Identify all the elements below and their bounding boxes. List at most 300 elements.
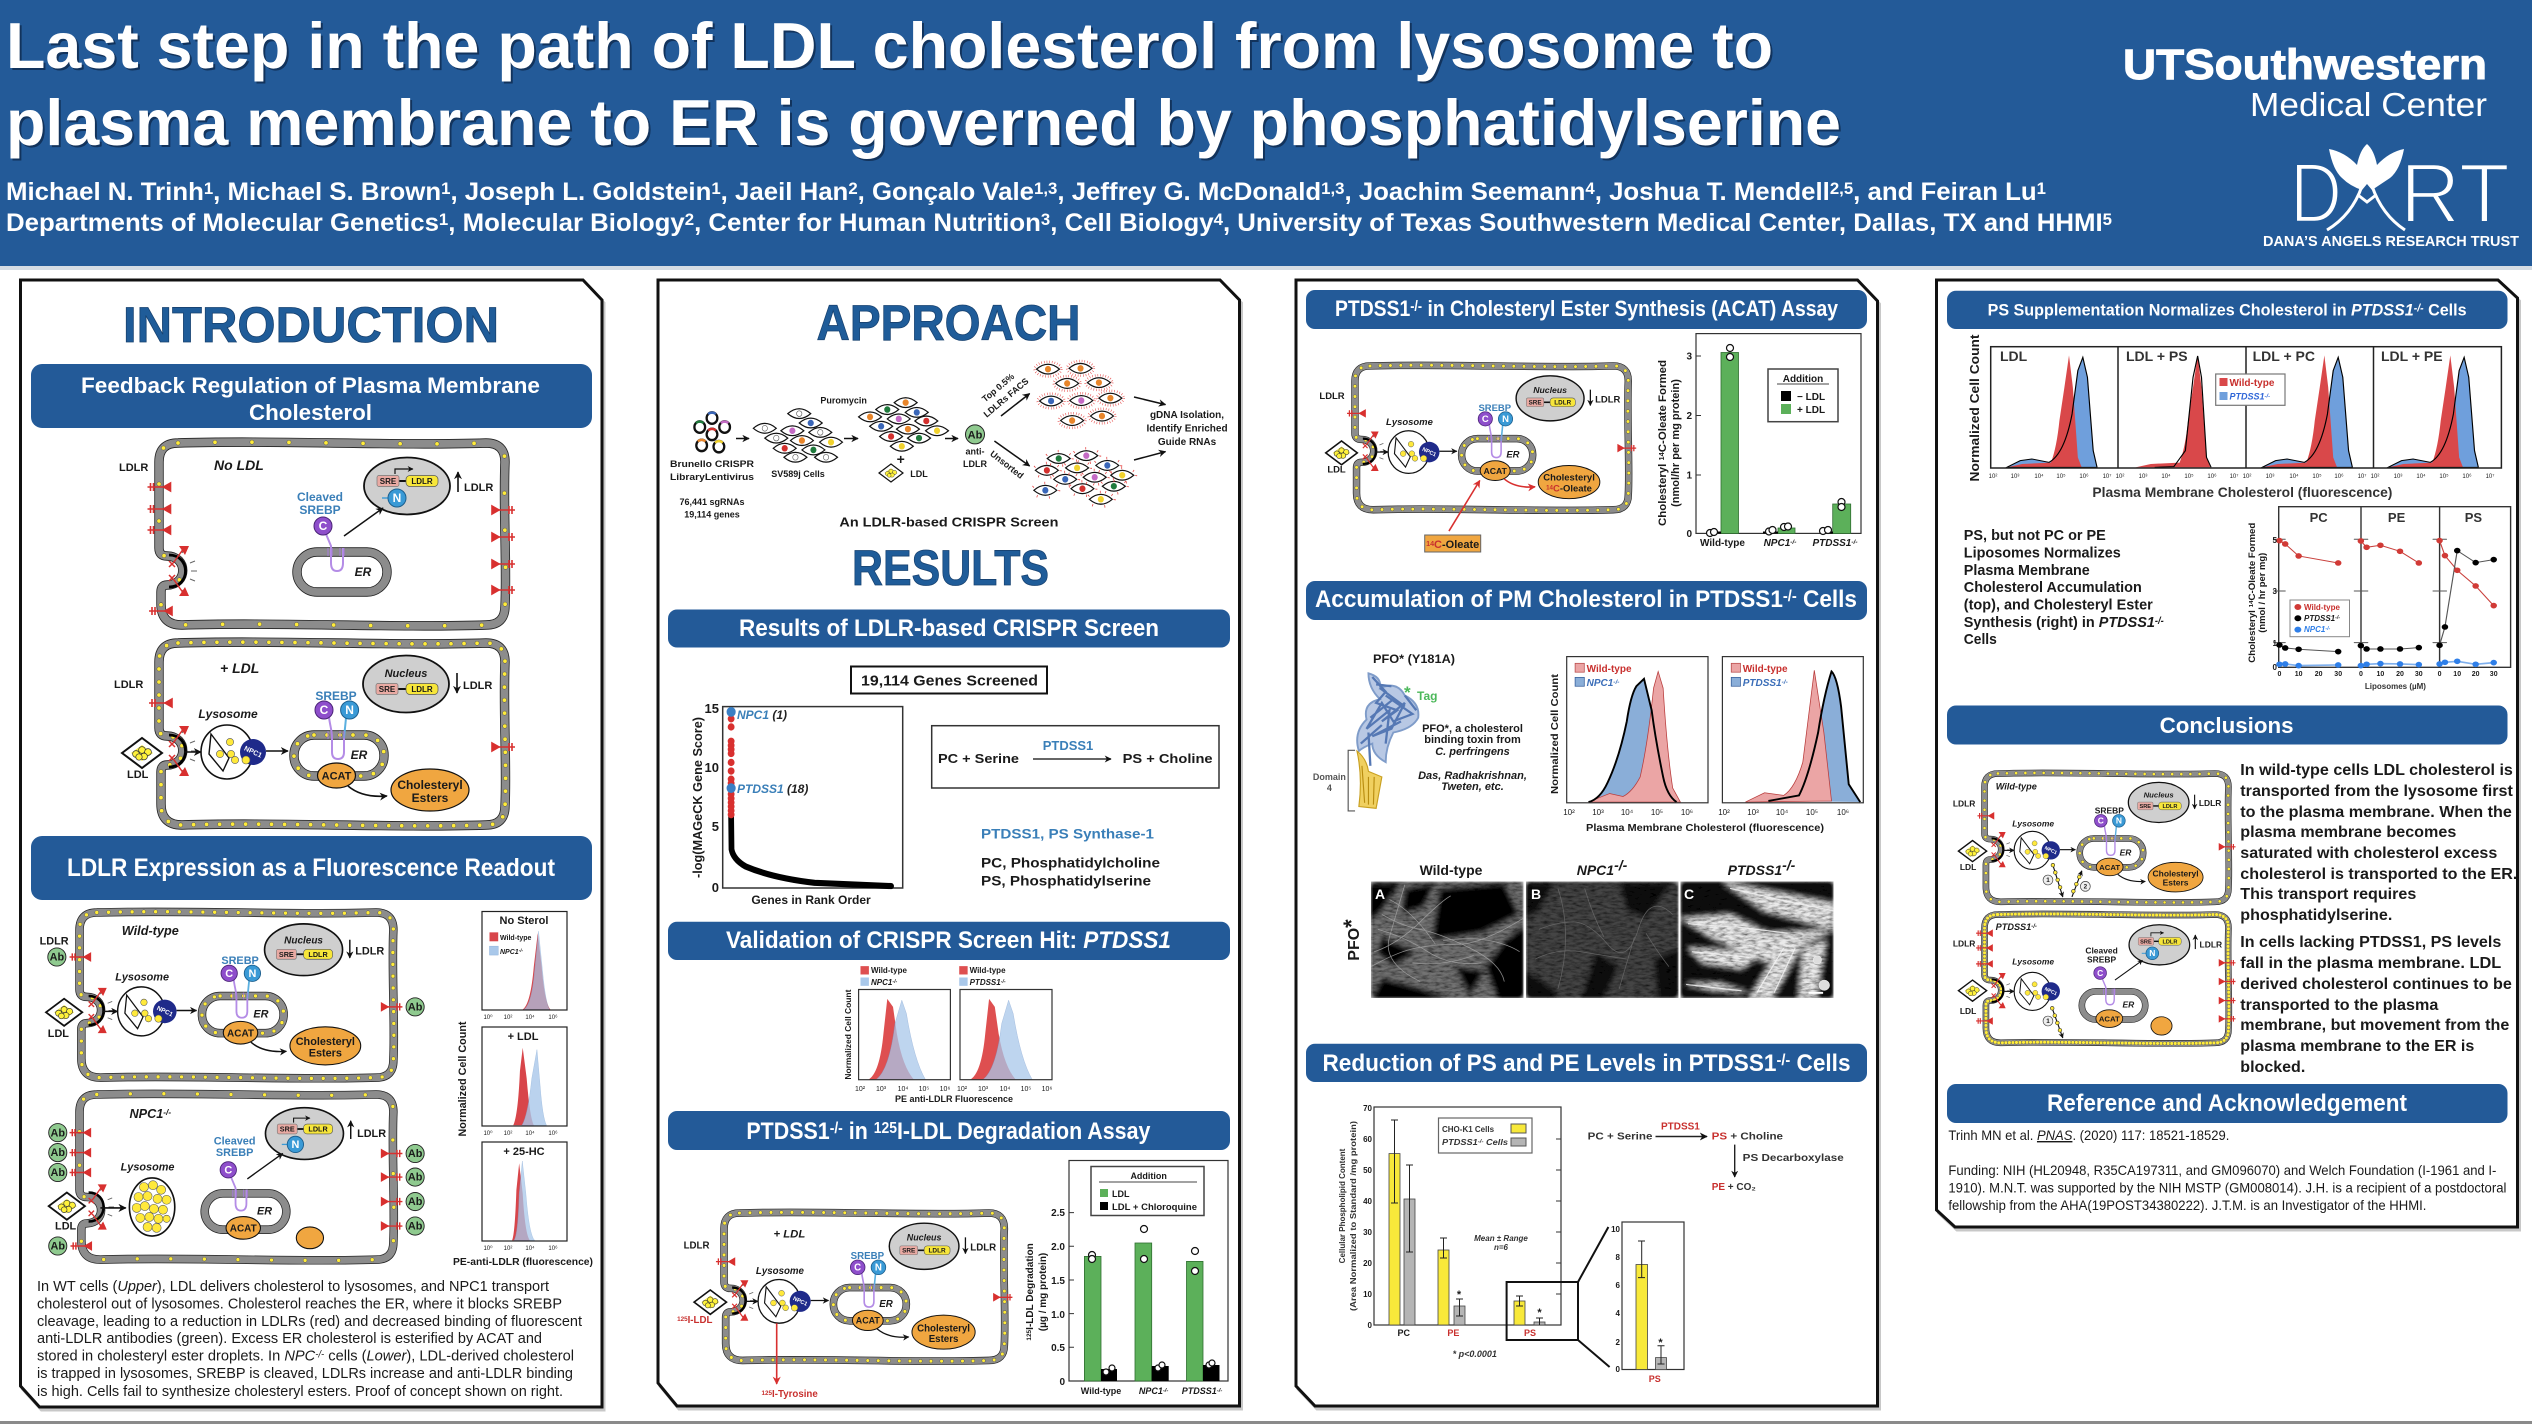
diagram: PTDSS1 knockout conclusion cell: NPC1 <box>2043 986 2058 997</box>
figure: PFO toxin structure: 4 <box>1327 783 1332 793</box>
diagram: wild-type cell: LDLR <box>40 935 69 947</box>
chart: liposome histograms: 10⁶ <box>2462 473 2472 480</box>
diagram: CRISPR screen workflow: 76,441 sgRNAs <box>679 497 745 507</box>
legend: cell lines: CHO-K1 Cells <box>1442 1125 1495 1134</box>
section header: reference and acknowledgement: Reference and Acknowledgement <box>2047 1090 2407 1117</box>
chart: cholesteryl oleate bars: Wild-type <box>1700 538 1745 549</box>
diagram: wild-type conclusion cell: ACAT <box>2099 863 2120 872</box>
chart: cholesteryl ester liposome series: 0 <box>2277 671 2281 678</box>
chart: liposome histograms: 10⁵ <box>2184 473 2194 480</box>
text block: PTDSS1 conclusion: blocked. <box>2240 1059 2305 1076</box>
diagram: wild-type cell: LDLR <box>308 950 328 959</box>
chart: liposome histograms: 10² <box>1989 474 1997 480</box>
logo: UT Southwestern Medical Center: Medical Center <box>2250 86 2487 123</box>
chart: gene rank scatter: 10 <box>705 760 719 775</box>
chart: PS inset bars: 6 <box>1616 1281 1621 1290</box>
figure: PFO toxin structure: Tag <box>1417 689 1437 703</box>
chart: gene rank scatter: 5 <box>712 819 719 834</box>
panel: supplementation and conclusions <box>1936 280 2520 1230</box>
chart: plasma membrane cholesterol histograms: 10⁴ <box>1621 808 1634 817</box>
text block: PTDSS1 conclusion: derived cholesterol continues to be <box>2240 976 2512 993</box>
chart: validation histograms <box>844 966 1052 1104</box>
diagram: CRISPR screen workflow: + <box>897 451 905 467</box>
diagram: cell in ACAT assay: NPC1 <box>1421 447 1437 458</box>
diagram: wild-type cell: C <box>225 968 233 980</box>
chart: phospholipid bars: Mean ± Range <box>1474 1234 1528 1243</box>
text block: introduction description: In WT cells (Upper), LDL delivers cholesterol to lysosomes, and NPC1 transport <box>37 1278 550 1295</box>
figure: PFO micrographs: PTDSS1-/- <box>1728 857 1796 878</box>
section header: LDLR expression <box>31 836 592 900</box>
diagram: cell in degradation assay: 125I-Tyrosine <box>762 1389 818 1400</box>
diagram: phospholipid pathway: PC + Serine <box>1588 1132 1653 1142</box>
chart: plasma membrane cholesterol histograms: 10⁶ <box>1837 808 1849 817</box>
diagram: wild-type conclusion cell: LDLR <box>1953 799 1975 809</box>
text block: wild-type conclusion: phosphatidylserine. <box>2240 907 2392 924</box>
diagram: cell with LDL: ER <box>351 748 368 762</box>
section header: PS supplementation <box>1947 291 2508 329</box>
chart: cholesteryl ester liposome series: Cholesteryl 14C-Oleate Formed <box>2247 523 2257 663</box>
diagram: cell in degradation assay: NPC1 <box>792 1296 808 1308</box>
chart: phospholipid bars <box>1338 1104 1610 1367</box>
diagram: cell without LDL: LDLR <box>464 482 493 494</box>
diagram: cell in degradation assay: C <box>854 1263 861 1274</box>
chart: LDL degradation bars: 1.5 <box>1051 1276 1065 1287</box>
cell population: puromycin selected <box>859 398 949 451</box>
chart: liposome histograms: Normalized Cell Count <box>1967 334 1982 482</box>
diagram: wild-type conclusion cell: C <box>2098 816 2104 826</box>
diagram: phospholipid pathway: PS + Choline <box>1712 1132 1784 1142</box>
chart: cholesteryl oleate bars <box>1657 334 1861 549</box>
legend: ACAT addition <box>1768 369 1838 422</box>
diagram: PTDSS1 knockout conclusion cell: SREBP <box>2087 954 2116 964</box>
chart: PS inset bars: 8 <box>1616 1253 1621 1262</box>
chart: cholesteryl ester liposome series: 10 <box>2453 671 2461 678</box>
legend: cell lines: PTDSS1 -/- Cells <box>1442 1138 1509 1147</box>
section header: CRISPR screen results <box>668 610 1230 648</box>
diagram: NPC1 knockout cell: Ab <box>51 1167 65 1179</box>
diagram: PTDSS1 knockout conclusion cell: LDLR <box>2162 939 2177 945</box>
text block: reference and funding <box>1948 1127 2506 1213</box>
chart: LDLR fluorescence histograms: 10⁶ <box>548 1130 558 1137</box>
diagram: PTDSS1 knockout conclusion cell: C <box>2097 968 2103 978</box>
chart: liposome histograms: 10³ <box>2011 474 2019 480</box>
diagram: NPC1 knockout cell: SREBP <box>216 1147 253 1159</box>
text block: liposome summary: (top), and Cholesteryl Ester <box>1964 596 2153 614</box>
chart: validation histograms: Wild-type <box>970 966 1006 975</box>
diagram: cell in degradation assay: + LDL <box>773 1228 805 1240</box>
chart: PS inset bars: 2 <box>1616 1338 1621 1347</box>
text block: PTDSS1 conclusion: plasma membrane to the ER is <box>2240 1038 2474 1055</box>
diagram: cell in ACAT assay <box>1319 365 1636 531</box>
diagram: wild-type cell: SRE <box>279 950 294 959</box>
chart: phospholipid bars: * <box>1457 1289 1462 1301</box>
diagram: PTDSS1 knockout conclusion cell: Cleaved <box>2085 945 2118 955</box>
diagram: wild-type conclusion cell: Cholesteryl <box>2153 868 2199 878</box>
diagram: NPC1 knockout cell: Ab <box>408 1172 423 1184</box>
chart: cholesteryl ester liposome series: PS <box>2465 510 2482 525</box>
chart: cholesteryl oleate bars: 0 <box>1686 529 1692 540</box>
diagram: CRISPR screen workflow: LDLRs FACS <box>982 376 1031 419</box>
chart: phospholipid bars: PC <box>1397 1328 1410 1338</box>
chart: gene rank scatter: Genes in Rank Order <box>751 893 871 907</box>
text block: wild-type conclusion: In wild-type cells LDL cholesterol is <box>2240 762 2513 779</box>
diagram: wild-type cell: Wild-type <box>122 924 179 938</box>
diagram: CRISPR screen workflow: Puromycin <box>820 396 867 406</box>
diagram: phospholipid pathway: PS Decarboxylase <box>1743 1153 1844 1164</box>
diagram: cell in ACAT assay: Cholesteryl <box>1543 472 1595 483</box>
text block: reference and funding: 1910). M.N.T. was supported by the NIH MSTP (GM008014). J.H. is a recipient of a postdoctoral <box>1948 1180 2506 1196</box>
diagram: CRISPR screen workflow: Top 0.5% <box>980 371 1016 404</box>
chart: liposome histograms: 10⁷ <box>2103 473 2111 480</box>
chart: liposome histograms: 10⁴ <box>2289 473 2299 480</box>
diagram: NPC1 knockout cell: N <box>291 1139 299 1151</box>
arrows: workflow steps <box>736 394 1166 466</box>
chart: LDL degradation bars: 125I-LDL Degradation <box>1025 1243 1036 1341</box>
chart: liposome histograms: 10⁶ <box>2079 473 2089 480</box>
chart: liposome histograms: 10⁶ <box>2334 473 2344 480</box>
diagram: NPC1 knockout cell: ER <box>257 1205 272 1217</box>
text block: liposome summary <box>1964 527 2164 648</box>
chart: liposome histograms: 10⁷ <box>2486 473 2494 480</box>
chart: phospholipid bars: 20 <box>1363 1259 1373 1268</box>
chart: LDLR fluorescence histograms: 10² <box>504 1131 512 1137</box>
chart: plasma membrane cholesterol histograms: 10⁶ <box>1681 808 1693 817</box>
diagram: cell with LDL: ACAT <box>322 770 352 782</box>
diagram: cell with LDL: Lysosome <box>198 707 258 721</box>
panel: approach and results <box>658 280 1242 1409</box>
chart: cholesteryl ester liposome series: 10 <box>2377 671 2384 678</box>
chart: LDLR fluorescence histograms: 10² <box>504 1015 512 1021</box>
legend: liposome histograms: PTDSS1-/- <box>2230 392 2270 402</box>
diagram: wild-type cell: NPC1 <box>156 1005 174 1019</box>
diagram: cell in ACAT assay: Nucleus <box>1533 385 1567 395</box>
chart: gene rank scatter: -log(MAGeCK Gene Score) <box>690 717 705 878</box>
chart: phospholipid bars: PS <box>1524 1328 1536 1338</box>
chart: validation histograms: 10⁶ <box>940 1086 950 1093</box>
text block: wild-type conclusion: cholesterol is transported to the ER. <box>2240 866 2517 883</box>
chart: cholesteryl ester liposome series: 10 <box>2295 671 2303 678</box>
figure: PFO micrographs: C <box>1684 886 1694 902</box>
section header: PM cholesterol accumulation: Accumulation of PM Cholesterol in PTDSS1-/- Cells <box>1315 586 1857 613</box>
diagram: wild-type conclusion cell: NPC1 <box>2043 845 2058 856</box>
diagram: cell with LDL: N <box>345 703 354 717</box>
diagram: cell without LDL: Cleaved <box>297 490 343 504</box>
diagram: PTDSS1 reaction: PC + Serine <box>938 751 1019 766</box>
logo: UT Southwestern Medical Center: UTSouthwestern <box>2123 41 2487 89</box>
chart: LDLR fluorescence histograms: PE-anti-LDLR (fluorescence) <box>453 1257 593 1268</box>
text block: PFO description: binding toxin from <box>1424 734 1521 746</box>
chart: cholesteryl oleate bars: 2 <box>1686 411 1692 422</box>
diagram: cell without LDL: LDLR <box>411 477 433 486</box>
chart: liposome histograms: 10³ <box>2266 474 2274 480</box>
diagram: cell in degradation assay: SRE <box>902 1248 916 1255</box>
chart: validation histograms: 10³ <box>876 1086 887 1093</box>
cell population: top LDLR cells <box>1035 361 1124 428</box>
diagram: cell with LDL: Nucleus <box>385 668 427 680</box>
diagram: wild-type cell: Nucleus <box>284 935 323 946</box>
chart: validation histograms: PTDSS1-/- <box>970 978 1006 987</box>
diagram: PTDSS1 knockout conclusion cell <box>1953 914 2236 1043</box>
chart: liposome histograms: 10⁷ <box>2358 473 2366 480</box>
legend: liposome series: Wild-type <box>2304 603 2340 612</box>
chart: LDL degradation bars: 0.5 <box>1051 1343 1065 1354</box>
text block: reference and funding: fellowship from the AHA(19POST34380222). J.T.M. is an Investigator of the HHMI. <box>1948 1197 2426 1213</box>
chart: phospholipid bars: 70 <box>1363 1104 1373 1113</box>
chart: gene rank scatter: PTDSS1 (18) <box>737 782 808 796</box>
chart: phospholipid bars: * p<0.0001 <box>1453 1349 1497 1359</box>
logo: DART <box>2263 144 2519 250</box>
chart: cholesteryl ester liposome series: 20 <box>2315 671 2323 678</box>
diagram: phospholipid pathway: PE + CO₂ <box>1712 1182 1756 1193</box>
diagram: cell in degradation assay: Nucleus <box>907 1233 941 1243</box>
callout: 14C-oleate: 14C-Oleate <box>1426 539 1479 551</box>
text block: introduction description: is high. Cells fail to synthesize cholesteryl esters. Proof of concept shown on right. <box>37 1383 563 1400</box>
chart: LDLR fluorescence histograms: + LDL <box>508 1031 539 1043</box>
legend: liposome histograms <box>2216 374 2285 405</box>
figure: PFO micrographs: PFO* <box>1339 919 1364 961</box>
text block: PFO description <box>1418 723 1527 793</box>
title: Last step in the path of LDL cholesterol from lysosome to <box>8 11 1775 84</box>
diagram: cell with LDL: C <box>320 703 329 717</box>
diagram: cell without LDL: N <box>393 491 401 505</box>
chart: cholesteryl ester liposome series: 30 <box>2334 671 2342 678</box>
title <box>6 9 1843 161</box>
diagram: wild-type cell: Lysosome <box>115 972 169 984</box>
chart: cholesteryl oleate bars: 3 <box>1686 352 1692 362</box>
diagram: wild-type conclusion cell: ER <box>2120 847 2132 857</box>
diagram: NPC1 knockout cell: SRE <box>280 1125 295 1134</box>
chart: LDLR fluorescence histograms: 10⁴ <box>525 1130 535 1137</box>
legend: liposome histograms: Wild-type <box>2230 378 2275 389</box>
section header: feedback regulation: Cholesterol <box>249 400 372 425</box>
diagram: wild-type cell: Ab <box>50 952 64 964</box>
legend: liposome series: NPC1-/- <box>2304 625 2331 634</box>
chart: LDLR fluorescence histograms <box>453 912 593 1268</box>
chart: plasma membrane cholesterol histograms: 10⁴ <box>1776 808 1789 817</box>
micrograph A: wild-type <box>1371 882 1523 998</box>
diagram: CRISPR screen workflow: gDNA Isolation, <box>1150 410 1224 421</box>
text block: PTDSS1 conclusion <box>2240 934 2512 1076</box>
diagram: CRISPR screen workflow: Identify Enriched <box>1146 424 1228 434</box>
diagram: wild-type conclusion cell: N <box>2116 816 2122 826</box>
diagram: cell with LDL <box>114 642 515 826</box>
text block: reference and funding: Trinh MN et al. PNAS. (2020) 117: 18521-18529. <box>1948 1127 2229 1143</box>
diagram: NPC1 knockout cell: Ab <box>51 1241 65 1253</box>
chart: liposome histograms: 10² <box>2116 474 2124 480</box>
diagram: CRISPR screen workflow: LDLR <box>963 459 987 469</box>
chart: validation histograms: 10³ <box>978 1086 989 1093</box>
chart: plasma membrane cholesterol histograms: NPC1-/- <box>1587 678 1619 689</box>
chart: phospholipid bars: 40 <box>1363 1197 1373 1206</box>
diagram: NPC1 knockout cell: LDL <box>55 1221 77 1233</box>
diagram: NPC1 knockout cell: Ab <box>51 1147 65 1159</box>
diagram: cell without LDL: SREBP <box>299 503 341 517</box>
figure: PFO toxin structure: PFO* (Y181A) <box>1373 652 1455 666</box>
text block: introduction description: cleavage, leading to a reduction in LDLRs (red) and decreased binding of fluorescent <box>37 1313 583 1330</box>
heading: results: RESULTS <box>852 540 1049 596</box>
callout: 14C-oleate <box>1425 535 1481 552</box>
chart: liposome histograms: LDL + PC <box>2253 348 2315 364</box>
chart: phospholipid bars: 30 <box>1363 1228 1373 1237</box>
diagram: cell with LDL: LDLR <box>114 679 143 691</box>
diagram: NPC1 knockout cell: Ab <box>408 1196 423 1208</box>
text block: liposome summary: Synthesis (right) in PTDSS1-/- <box>1964 614 2164 631</box>
figure: PFO micrographs: NPC1-/- <box>1577 857 1628 878</box>
chart: gene rank scatter: NPC1 (1) <box>737 708 787 722</box>
chart: PS inset bars: 0 <box>1616 1365 1621 1374</box>
diagram: wild-type cell: N <box>248 968 256 980</box>
chart: validation histograms: Wild-type <box>871 966 907 975</box>
chart: phospholipid bars: PE <box>1447 1328 1459 1338</box>
text block: introduction description: stored in cholesteryl ester droplets. In NPC-/- cells (Lower), LDL-derived cholesterol <box>37 1348 574 1364</box>
logo: DART: RT <box>2400 146 2510 240</box>
section header: reference and acknowledgement <box>1947 1084 2508 1123</box>
section header: LDLR expression: LDLR Expression as a Fluorescence Readout <box>67 854 556 882</box>
legend: degradation addition: Addition <box>1130 1171 1167 1181</box>
chart: gene rank scatter <box>690 701 903 907</box>
diagram: PTDSS1 knockout conclusion cell: Lysosome <box>2012 957 2054 967</box>
section header: PS and PE reduction: Reduction of PS and PE Levels in PTDSS1-/- Cells <box>1322 1050 1850 1077</box>
chart: liposome histograms: LDL + PE <box>2381 348 2443 364</box>
chart: LDL degradation bars: (µg / mg protein) <box>1038 1253 1049 1331</box>
affiliations: Departments of Molecular Genetics 1, Molecular Biology 2, Center for Human Nutrition 3, Cell Biology 4, University of Texas Southwestern Medical Center, Dallas, TX and HHMI 5 <box>6 209 2112 237</box>
diagram: PTDSS1 reaction: PS + Choline <box>1123 751 1213 766</box>
chart: validation histograms: 10⁵ <box>919 1086 929 1093</box>
text block: liposome summary: Cholesterol Accumulation <box>1964 579 2142 596</box>
chart: PS inset bars: 10 <box>1611 1225 1621 1234</box>
diagram: cell in degradation assay: Esters <box>929 1334 958 1345</box>
chart: LDLR fluorescence histograms: 10² <box>504 1246 512 1252</box>
diagram: CRISPR screen workflow: LDL <box>910 469 928 479</box>
diagram: cell in ACAT assay: N <box>1502 414 1509 425</box>
text block: PTDSS1 conclusion: fall in the plasma membrane. LDL <box>2240 955 2502 972</box>
panel: introduction <box>20 280 604 1410</box>
section header: conclusions <box>1947 706 2508 744</box>
text block: abbreviations: PS, Phosphatidylserine <box>981 872 1151 888</box>
diagram: PTDSS1 knockout conclusion cell: 1 <box>2046 1018 2050 1025</box>
diagram: cell in ACAT assay: Lysosome <box>1386 417 1433 428</box>
chart: phospholipid bars: 60 <box>1363 1135 1373 1144</box>
chart: LDLR fluorescence histograms: 10⁴ <box>525 1245 535 1252</box>
chart: plasma membrane cholesterol histograms: 10³ <box>1592 808 1604 817</box>
logo: DART: D <box>2290 146 2342 240</box>
diagram: cell in ACAT assay: LDL <box>1327 465 1346 476</box>
diagram: cell without LDL: ER <box>355 565 372 579</box>
chart: cholesteryl oleate bars: 1 <box>1686 470 1692 482</box>
diagram: wild-type conclusion cell: Lysosome <box>2012 818 2054 828</box>
section header: ACAT assay: PTDSS1-/- in Cholesteryl Ester Synthesis (ACAT) Assay <box>1335 296 1839 321</box>
chart: cholesteryl oleate bars: NPC1-/- <box>1764 538 1796 549</box>
chart: cholesteryl ester liposome series: 20 <box>2396 671 2404 678</box>
chart: cholesteryl ester liposome series: 1 <box>2273 639 2278 648</box>
chart: validation histograms: 10⁵ <box>1021 1086 1031 1093</box>
diagram: cell in degradation assay: 125I-LDL <box>677 1315 712 1326</box>
chart: LDL degradation bars: Wild-type <box>1081 1386 1121 1396</box>
chart: plasma membrane cholesterol histograms: 10⁵ <box>1651 808 1663 817</box>
diagram: cell without LDL: LDLR <box>119 462 148 474</box>
text block: wild-type conclusion: saturated with cholesterol excess <box>2240 845 2497 862</box>
diagram: wild-type cell: Cholesteryl <box>296 1036 355 1048</box>
diagram: CRISPR screen workflow: Unsorted <box>988 449 1025 481</box>
diagram: wild-type cell: ACAT <box>227 1028 254 1039</box>
chart: liposome histograms: 10⁴ <box>2416 473 2426 480</box>
legend: cell lines <box>1438 1118 1532 1153</box>
section header: degradation assay: PTDSS1-/- in 125I-LDL Degradation Assay <box>746 1118 1151 1145</box>
diagram: cell in degradation assay: N <box>875 1263 882 1274</box>
diagram: cell in ACAT assay: 14C-Oleate <box>1546 484 1592 495</box>
diagram: cell in degradation assay: ACAT <box>856 1316 880 1326</box>
section header: feedback regulation: Feedback Regulation of Plasma Membrane <box>81 373 540 398</box>
chart: validation histograms: NPC1-/- <box>871 978 898 987</box>
diagram: cell with LDL: NPC1 <box>243 745 263 760</box>
diagram: cell in ACAT assay: SREBP <box>1478 403 1511 414</box>
title: Last step in the path of LDL cholesterol from lysosome to <box>6 9 1773 82</box>
section header: feedback regulation <box>31 364 592 428</box>
diagram: NPC1 knockout cell: Ab <box>51 1127 65 1139</box>
chart: LDL degradation bars: 2.0 <box>1051 1242 1065 1253</box>
section header: PM cholesterol accumulation <box>1306 581 1867 620</box>
chart: gene rank scatter: 0 <box>712 880 719 895</box>
diagram: cell without LDL: C <box>319 519 328 533</box>
diagram: CRISPR screen workflow: anti- <box>966 446 985 456</box>
diagram: cell in ACAT assay: C <box>1482 414 1489 425</box>
diagram: wild-type cell <box>40 912 424 1078</box>
chart: cholesteryl ester liposome series: 0 <box>2359 671 2363 678</box>
chart: cholesteryl ester liposome series: 20 <box>2472 671 2480 678</box>
diagram: wild-type conclusion cell: Nucleus <box>2144 790 2174 799</box>
section header: validation: Validation of CRISPR Screen Hit: PTDSS1 <box>726 927 1171 954</box>
legend: degradation addition: LDL + Chloroquine <box>1112 1202 1197 1212</box>
chart: liposome histograms: 10³ <box>2139 474 2147 480</box>
panel: cholesterol assays <box>1296 280 1880 1409</box>
figure: PFO toxin structure: Domain <box>1313 772 1346 782</box>
diagram: wild-type conclusion cell: 2 <box>2084 883 2088 890</box>
text block: liposome summary: Plasma Membrane <box>1964 562 2090 579</box>
text block: abbreviations <box>981 826 1160 888</box>
chart: validation histograms: 10⁴ <box>898 1086 908 1093</box>
diagram: wild-type conclusion cell: LDLR <box>2199 798 2221 808</box>
diagram: PTDSS1 knockout conclusion cell: ER <box>2122 1000 2135 1010</box>
section header: CRISPR screen results: Results of LDLR-based CRISPR Screen <box>739 615 1159 642</box>
chart: plasma membrane cholesterol histograms: Wild-type <box>1743 664 1788 675</box>
text block: introduction description: is trapped in lysosomes, SREBP is cleaved, LDLRs increase and anti-LDLR binding <box>37 1365 573 1382</box>
legend: liposome series: PTDSS1-/- <box>2304 614 2340 623</box>
diagram: wild-type conclusion cell: SREBP <box>2095 806 2124 816</box>
diagram: cell with LDL: + LDL <box>220 660 259 676</box>
diagram: phospholipid pathway <box>1588 1122 1844 1193</box>
chart: PS inset bars <box>1611 1222 1684 1384</box>
text block: PFO description: Das, Radhakrishnan, <box>1418 770 1527 782</box>
chart: plasma membrane cholesterol histograms: 10² <box>1563 808 1575 817</box>
chart: gene rank scatter: 15 <box>705 701 719 716</box>
diagram: NPC1 knockout cell: LDLR <box>357 1128 386 1140</box>
chart: PS inset bars: PS <box>1649 1374 1661 1384</box>
chart: liposome histograms: 10⁵ <box>2312 473 2322 480</box>
chart: phospholipid bars: Cellular Phospholipid Content <box>1338 1148 1347 1263</box>
diagram: cell in degradation assay: Lysosome <box>756 1266 805 1277</box>
diagram: PTDSS1 reaction: PTDSS1 <box>1043 738 1093 753</box>
chart: liposome histograms: 10⁴ <box>2161 473 2171 480</box>
diagram: CRISPR screen workflow: Guide RNAs <box>1158 437 1217 448</box>
chart: validation histograms: 10⁴ <box>1000 1086 1010 1093</box>
text block: reference and funding: Funding: NIH (HL20948, R35CA197311, and GM096070) and Welch Foundation (I-1961 and I- <box>1948 1162 2497 1178</box>
legend: liposome series <box>2290 600 2350 637</box>
legend: ACAT addition: − LDL <box>1797 392 1825 403</box>
diagram: wild-type conclusion cell: LDLR <box>2162 804 2177 810</box>
diagram: phospholipid pathway: PTDSS1 <box>1661 1122 1700 1132</box>
chart: liposome histograms <box>1967 334 2501 500</box>
chart: plasma membrane cholesterol histograms: Normalized Cell Count <box>1550 673 1561 794</box>
